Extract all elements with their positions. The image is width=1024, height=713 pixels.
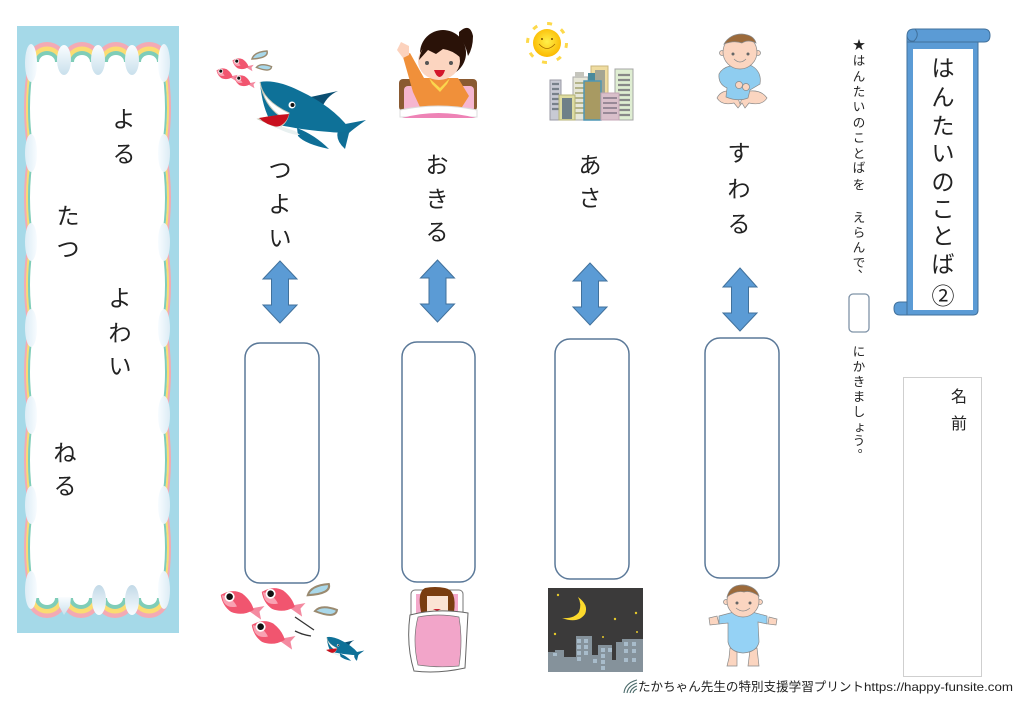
arrow 4 bbox=[723, 268, 757, 331]
instructions: えらんで bbox=[853, 211, 865, 270]
instructions: 。 bbox=[858, 441, 870, 455]
name box bbox=[904, 378, 982, 676]
illustration: baby sitting bbox=[717, 34, 767, 108]
arrow 1 bbox=[263, 261, 297, 323]
instructions bbox=[849, 38, 870, 455]
footer url: https://happy-funsite.com bbox=[864, 680, 1013, 694]
instructions: ょ bbox=[854, 420, 866, 434]
instructions: にかきまし bbox=[853, 345, 866, 419]
title number: ② bbox=[932, 283, 954, 309]
answer box 3 bbox=[555, 339, 629, 579]
arrow 3 bbox=[573, 263, 607, 325]
rainbow border: right side bbox=[162, 63, 170, 590]
illustration: night city bbox=[548, 588, 643, 672]
word: よる: よる bbox=[112, 106, 136, 167]
illustration: sun over city bbox=[528, 24, 633, 120]
rainbow border: left side bbox=[25, 63, 33, 590]
arrow 2 bbox=[420, 260, 454, 322]
small answer box sample bbox=[849, 294, 869, 332]
panel: word choices bbox=[17, 26, 179, 633]
answer box 1 bbox=[245, 343, 319, 583]
illustration: baby standing bbox=[709, 585, 777, 666]
word: おきる: おきる bbox=[426, 152, 448, 245]
illustration: big shark chasing fish bbox=[215, 51, 366, 149]
title scroll bbox=[894, 29, 990, 315]
instructions: ★はんたいのことばを bbox=[853, 38, 866, 192]
rainbow border: top bbox=[27, 42, 169, 62]
illustration: girl asleep in bed bbox=[409, 587, 468, 672]
word: つよい: つよい bbox=[268, 157, 292, 251]
word: たつ: たつ bbox=[56, 203, 80, 262]
word: すわる: すわる bbox=[728, 140, 750, 237]
illustration: fish chasing small shark bbox=[217, 584, 364, 661]
clouds: bottom bbox=[58, 585, 139, 615]
instructions: う bbox=[853, 434, 865, 448]
word: あさ: あさ bbox=[578, 152, 602, 211]
name label: 名前 bbox=[951, 388, 967, 433]
sun bbox=[528, 24, 566, 62]
word: ねる: ねる bbox=[54, 440, 76, 499]
word: よわい: よわい bbox=[108, 285, 132, 379]
clouds: left side bbox=[25, 44, 37, 609]
clouds: right side bbox=[158, 44, 170, 609]
city buildings bbox=[550, 66, 633, 120]
answer box 2 bbox=[402, 342, 475, 582]
clouds: top bbox=[57, 45, 139, 75]
footer credit bbox=[624, 679, 1013, 694]
footer text: たかちゃん先生の特別支援学習プリント bbox=[638, 679, 864, 694]
answer box 4 bbox=[705, 338, 779, 578]
instructions: 、 bbox=[858, 261, 870, 275]
title text: はんたいのことば bbox=[932, 55, 954, 277]
rainbow border: bottom bbox=[27, 598, 169, 618]
illustration: girl waking up bbox=[397, 28, 477, 118]
icon: site logo bbox=[624, 680, 637, 693]
